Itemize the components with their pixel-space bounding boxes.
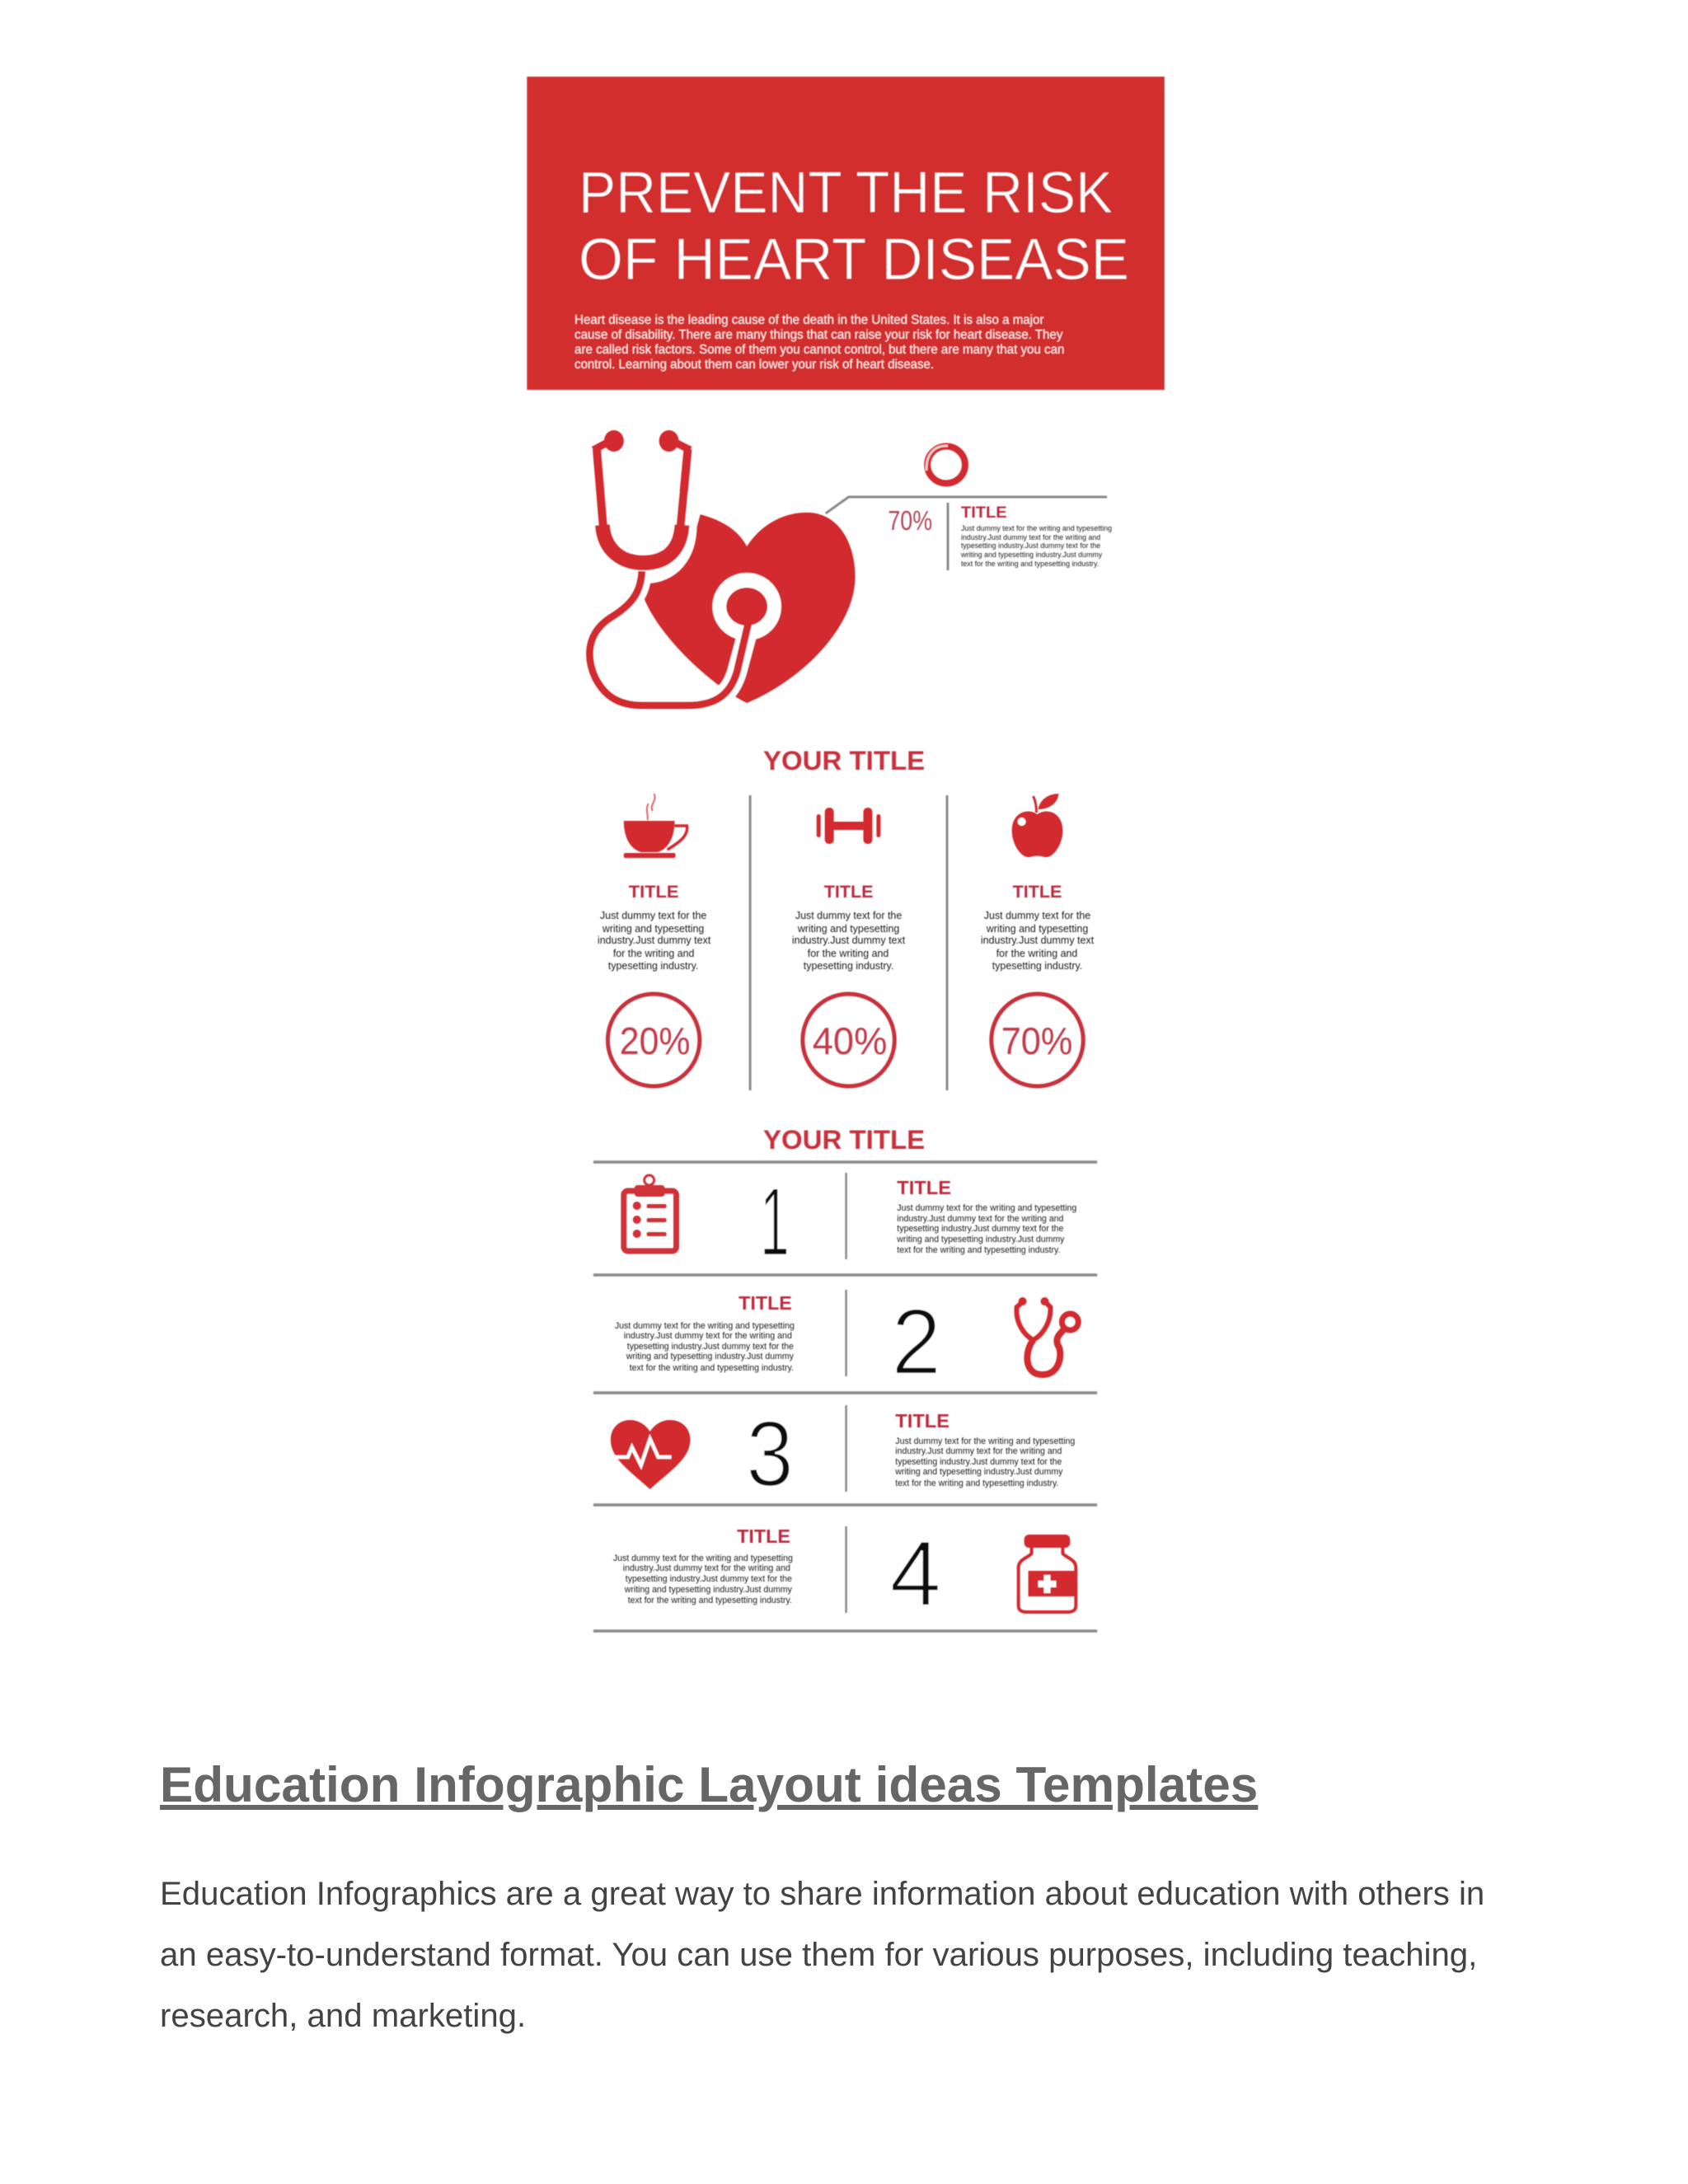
column 3: apple: typesetting industry.	[992, 959, 1082, 972]
row 3: industry.Just dummy text for the writing and	[895, 1446, 1062, 1456]
column 1: coffee	[598, 794, 711, 1086]
row 2: typesetting industry.Just dummy text for the	[627, 1342, 794, 1352]
column 2: dumbbell: industry.Just dummy text	[792, 934, 906, 946]
text block: education paragraph: research, and marketing.	[160, 1997, 526, 2034]
callout: 70% title: industry.Just dummy text for the writing and	[961, 533, 1100, 541]
heading: education infographic: Education Infographic Layout ideas Templates	[160, 1756, 1258, 1812]
intro text: are called risk factors. Some of them you cannot control, but there are many that you can	[574, 343, 1064, 357]
row 4: writing and typesetting industry.Just dummy	[624, 1585, 792, 1595]
text block: education paragraph: an easy-to-understand format. You can use them for various purposes, including teaching,	[160, 1936, 1477, 1973]
intro text: Heart disease is the leading cause of the death in the United States. It is also a major	[574, 313, 1043, 327]
heading: your title 1: YOUR TITLE	[763, 746, 925, 776]
icon: 70% donut	[926, 446, 965, 483]
column 1: coffee: 20%	[620, 1019, 690, 1062]
row 2: writing and typesetting industry.Just dummy	[626, 1352, 794, 1361]
row 4: 4	[889, 1521, 941, 1625]
row 3: writing and typesetting industry.Just dummy	[894, 1467, 1063, 1477]
panel: numbered list	[593, 1162, 1097, 1631]
row 4: text for the writing and typesetting industry.	[628, 1596, 792, 1605]
column 1: coffee: TITLE	[629, 883, 679, 902]
title: OF HEART DISEASE	[579, 227, 1129, 293]
column 2: dumbbell: writing and typesetting	[797, 922, 899, 935]
row 3	[610, 1402, 1075, 1506]
row 2: TITLE	[738, 1292, 792, 1314]
row 2: 2	[891, 1290, 941, 1394]
text block: education paragraph: Education Infographics are a great way to share information about education with others in	[160, 1875, 1484, 1912]
callout: 70% title: typesetting industry.Just dummy text for the	[961, 541, 1100, 550]
intro text	[574, 313, 1064, 372]
column 3: apple: TITLE	[1013, 883, 1062, 902]
column 3: apple: industry.Just dummy text	[981, 934, 1095, 946]
intro text: cause of disability. There are many things that can raise your risk for heart disease. They	[574, 328, 1063, 342]
row 2: text for the writing and typesetting industry.	[630, 1363, 794, 1373]
text block: education paragraph	[160, 1875, 1484, 2034]
row 1: text for the writing and typesetting industry.	[897, 1245, 1060, 1255]
heading: your title 2: YOUR TITLE	[763, 1125, 925, 1155]
callout: 70% title: TITLE	[961, 504, 1007, 522]
row 1	[624, 1167, 1076, 1276]
icon: heart with stethoscope	[589, 430, 856, 705]
row 1: industry.Just dummy text for the writing and	[897, 1214, 1063, 1224]
column 1: coffee: for the writing and	[613, 947, 694, 959]
title: PREVENT THE RISK	[579, 161, 1113, 226]
intro text: control. Learning about them can lower your risk of heart disease.	[574, 358, 934, 372]
column 2: dumbbell: for the writing and	[808, 947, 889, 959]
panel: three columns	[598, 794, 1095, 1090]
icon: clipboard	[624, 1175, 677, 1251]
column 2: dumbbell: 40%	[813, 1019, 887, 1062]
row 4: Just dummy text for the writing and typesetting	[613, 1554, 793, 1563]
column 3: apple: 70%	[1001, 1019, 1072, 1062]
column 1: coffee: industry.Just dummy text	[598, 934, 711, 946]
column 2: dumbbell	[792, 808, 906, 1086]
row 3: typesetting industry.Just dummy text for the	[895, 1457, 1062, 1467]
row 3: text for the writing and typesetting industry.	[895, 1479, 1058, 1488]
row 1: writing and typesetting industry.Just dummy	[896, 1235, 1065, 1244]
callout: 70% title: Just dummy text for the writing and typesetting	[961, 524, 1112, 532]
icon: apple	[1012, 794, 1062, 857]
panel: red title banner	[527, 77, 1165, 390]
column 3: apple: writing and typesetting	[986, 922, 1088, 935]
column 3: apple: Just dummy text for the	[984, 909, 1090, 921]
column 1: coffee: writing and typesetting	[602, 922, 704, 935]
callout: 70% title: text for the writing and typesetting industry.	[961, 560, 1099, 568]
row 1: TITLE	[897, 1177, 951, 1198]
row 4: TITLE	[737, 1526, 790, 1547]
row 2	[615, 1290, 1078, 1394]
icon: medicine bottle	[1019, 1535, 1076, 1612]
column 1: coffee: Just dummy text for the	[600, 909, 706, 921]
row 4: industry.Just dummy text for the writing and	[623, 1563, 790, 1573]
row 4: typesetting industry.Just dummy text for the	[626, 1574, 792, 1584]
column 1: coffee: typesetting industry.	[608, 959, 698, 972]
column 2: dumbbell: Just dummy text for the	[795, 909, 902, 921]
column 2: dumbbell: typesetting industry.	[804, 959, 893, 972]
row 1: Just dummy text for the writing and typesetting	[897, 1203, 1076, 1213]
icon: small stethoscope	[1016, 1297, 1078, 1375]
callout: 70% title: 70%	[888, 505, 932, 536]
column 3: apple: for the writing and	[996, 947, 1077, 959]
title	[579, 161, 1129, 293]
row 2: Just dummy text for the writing and typesetting	[615, 1321, 795, 1331]
row 4	[613, 1521, 1076, 1625]
icon: heart with pulse	[610, 1420, 690, 1489]
callout: 70% title	[826, 497, 1112, 570]
column 2: dumbbell: TITLE	[824, 883, 873, 902]
row 1: typesetting industry.Just dummy text for the	[897, 1224, 1063, 1234]
row 2: industry.Just dummy text for the writing and	[624, 1331, 792, 1341]
column 3: apple	[981, 794, 1095, 1086]
icon: dumbbell	[817, 808, 880, 844]
row 1: 1	[760, 1167, 790, 1276]
row 3: Just dummy text for the writing and typesetting	[895, 1436, 1075, 1446]
icon: coffee cup	[624, 794, 687, 858]
row 3: TITLE	[895, 1410, 950, 1432]
row 3: 3	[746, 1402, 794, 1506]
callout: 70% title: writing and typesetting industry.Just dummy	[960, 551, 1103, 559]
